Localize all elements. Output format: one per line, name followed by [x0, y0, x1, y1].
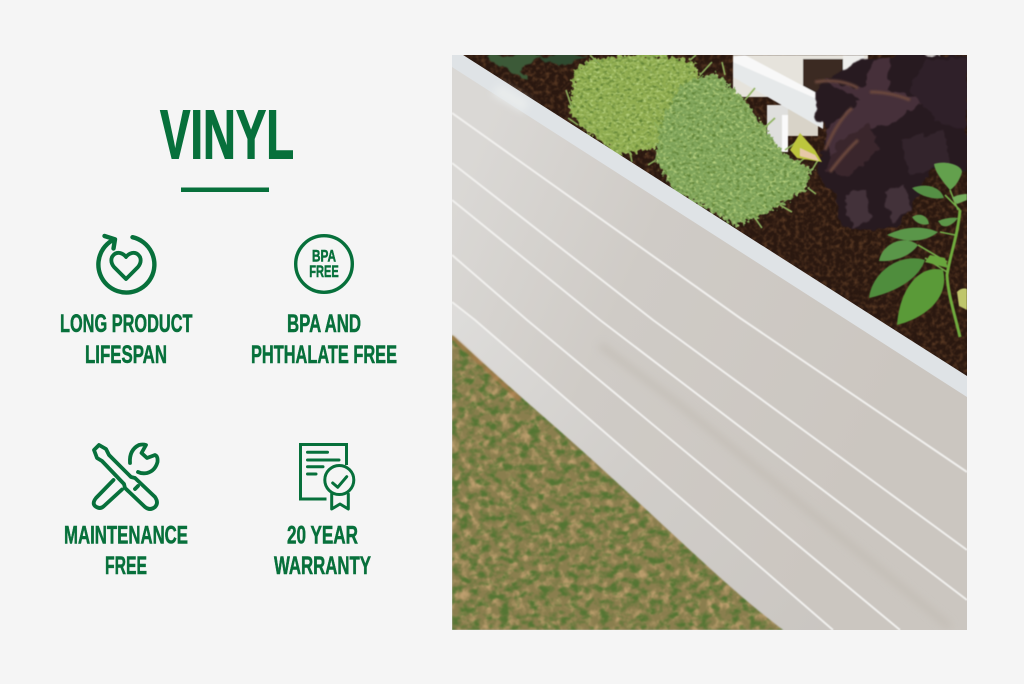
feature: 20 year warranty: [274, 444, 371, 580]
feature: long product lifespan: [60, 236, 192, 369]
label: 20 year warranty: WARRANTY: [274, 552, 371, 580]
grass: [452, 335, 783, 630]
grass edge soil tint: [452, 337, 520, 400]
label: BPA and phthalate free: BPA AND: [287, 310, 361, 338]
soil: [463, 55, 967, 380]
title: VINYL: VINYL: [160, 96, 294, 174]
photo: white vinyl raised garden bed: [452, 55, 967, 630]
planter wall upper slats: [452, 67, 575, 332]
label: 20 year warranty: 20 YEAR: [287, 522, 358, 550]
label: long product lifespan: LONG PRODUCT: [60, 310, 192, 338]
label: long product lifespan: LIFESPAN: [85, 341, 167, 369]
label: maintenance free: FREE: [105, 552, 147, 580]
white fence behind plants: [733, 55, 940, 152]
icon: BPA free badge: FREE: [309, 262, 339, 281]
small dark green plants at back: [485, 55, 590, 80]
label: maintenance free: MAINTENANCE: [64, 522, 188, 550]
planter rim: [452, 55, 967, 397]
herb bush right: [655, 72, 812, 225]
icon: heart in circular arrow: [98, 236, 154, 293]
label: 20 year warranty: [274, 522, 371, 580]
feature: maintenance free: [64, 444, 188, 580]
title underline: [181, 188, 269, 192]
infographic canvas: [60, 55, 967, 630]
icon: certificate with seal: [300, 444, 354, 509]
pepper plant: [869, 163, 967, 337]
icon: BPA free badge: BPA: [312, 246, 336, 266]
label: long product lifespan: [60, 310, 192, 369]
label: BPA and phthalate free: PHTHALATE FREE: [251, 341, 397, 369]
white slat lines: [452, 113, 967, 630]
icon: crossed screwdriver and wrench: [94, 444, 158, 509]
herb sprigs: [566, 55, 818, 230]
wall groove shadow: [605, 348, 638, 376]
feature: BPA and phthalate free: [251, 236, 397, 369]
icon: BPA free badge: [296, 236, 352, 292]
herb bush left: [570, 55, 705, 155]
yellow flower: [790, 133, 822, 162]
planter wall lower band: [452, 304, 591, 440]
label: BPA and phthalate free: [251, 310, 397, 369]
label: maintenance free: [64, 522, 188, 580]
basil leaf highlights: [815, 81, 910, 172]
purple basil: [815, 55, 967, 230]
